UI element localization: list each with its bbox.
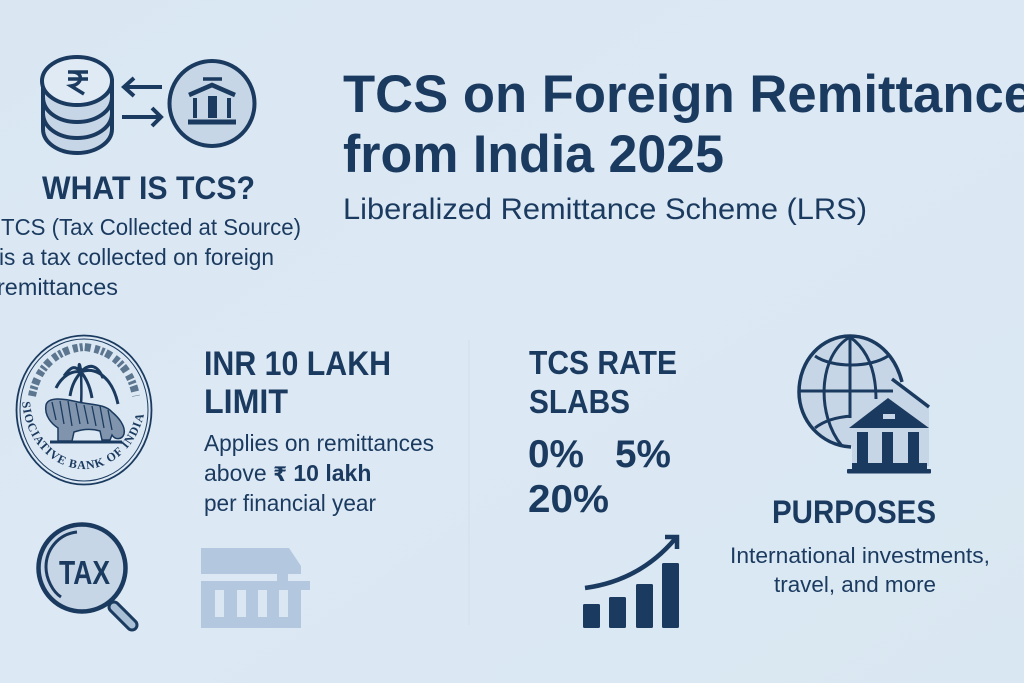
heading: INR 10 lakh limit [204, 345, 391, 421]
rate values: 0% [528, 433, 584, 476]
text block: limit detail: above ₹ 10 lakh [204, 460, 371, 486]
icon: rupee sign [68, 72, 88, 94]
icon: central bank seal [16, 334, 152, 486]
seal tiger [46, 399, 124, 441]
heading: what is TCS: WHAT IS TCS? [42, 170, 255, 206]
rate values: 20% [528, 478, 609, 521]
text block: TCS definition: TCS (Tax Collected at Source) [1, 214, 301, 240]
icon: rupee coin stack exchanging with bank [42, 57, 254, 153]
icon: tax magnifying glass [38, 524, 132, 625]
text block: TCS definition: remittances [0, 274, 118, 300]
heading: TCS rate slabs: SLABS [529, 383, 630, 420]
heading: TCS rate slabs: TCS RATE [529, 344, 677, 381]
title: from India 2025 [343, 125, 724, 184]
arrow: growth [585, 537, 677, 588]
arrow: to bank [122, 108, 161, 126]
heading: purposes: PURPOSES [772, 494, 936, 530]
heading: INR 10 lakh limit: LIMIT [204, 383, 288, 421]
text block: TCS definition: is a tax collected on foreign [0, 244, 274, 270]
subtitle: Liberalized Remittance Scheme (LRS) [343, 193, 867, 226]
text block: purposes detail: travel, and more [774, 572, 936, 597]
seal bottom lettering: SIOCIATIVE BANK OF INDIA [22, 402, 144, 470]
arrow: to coins [124, 78, 162, 96]
text block: TCS definition [0, 214, 301, 300]
title [343, 65, 1024, 184]
text block: limit detail [204, 430, 434, 516]
icon: coin stack [42, 57, 112, 153]
icon: globe and bank [799, 336, 931, 474]
rate values [528, 433, 671, 521]
rate values: 5% [615, 433, 671, 476]
text block: limit detail: per financial year [204, 490, 376, 516]
bar chart with rising arrow [583, 537, 679, 628]
icon: tax magnifying glass: TAX [59, 554, 110, 591]
bank building [847, 398, 931, 474]
seal top lettering marks [32, 347, 136, 396]
heading: TCS rate slabs [529, 344, 677, 420]
text block: purposes detail: International investments, [730, 543, 990, 568]
icon: bank in circle [170, 61, 254, 146]
heading: INR 10 lakh limit: INR 10 LAKH [204, 345, 391, 383]
title: TCS on Foreign Remittance [343, 65, 1024, 124]
text block: limit detail: Applies on remittances [204, 430, 434, 456]
seal palm tree [56, 364, 118, 404]
icon: pale bank building [201, 548, 310, 628]
text block: purposes detail [730, 543, 990, 597]
